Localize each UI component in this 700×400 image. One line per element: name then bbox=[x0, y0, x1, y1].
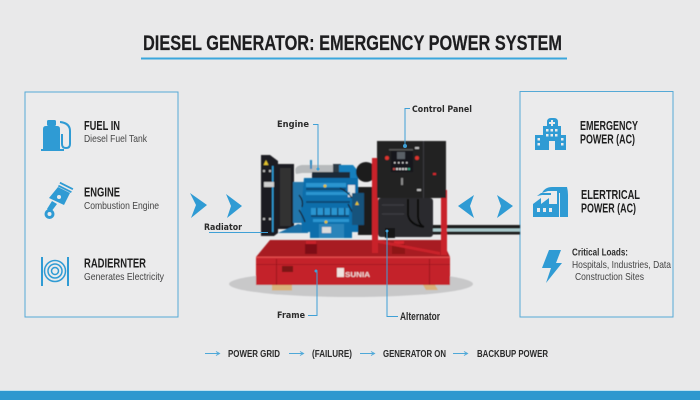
arrow bbox=[205, 352, 220, 356]
step: generator on: GENERATOR ON bbox=[383, 348, 446, 360]
frame: skid base: SUNIA bbox=[345, 270, 371, 279]
frame: lifting posts bbox=[372, 158, 447, 255]
callout: radiator bbox=[204, 223, 268, 233]
step: backup power: BACKBUP POWER bbox=[477, 348, 548, 360]
icon: fuel tank bbox=[41, 120, 71, 151]
text: engine bbox=[84, 186, 159, 212]
control panel bbox=[377, 141, 446, 198]
text: electrical power: POWER (AC) bbox=[581, 202, 636, 216]
icon: factory bbox=[533, 187, 568, 217]
text: emergency power: POWER (AC) bbox=[580, 132, 635, 146]
text: critical loads: Hospitals, Industries, Data bbox=[572, 259, 671, 271]
callout: control panel bbox=[403, 105, 472, 148]
ground shadow bbox=[229, 271, 473, 297]
text: electrical power: ELERTRICAL bbox=[581, 188, 640, 202]
icon: radiator bbox=[42, 257, 68, 286]
arrows: outflow bbox=[458, 195, 513, 218]
callout: engine: Engine bbox=[277, 120, 309, 130]
engine block bbox=[278, 160, 372, 238]
step: power grid: POWER GRID bbox=[228, 348, 280, 360]
footer bar bbox=[0, 390, 700, 400]
text: emergency power bbox=[580, 119, 638, 146]
panel: inputs bbox=[25, 92, 178, 317]
callout: frame bbox=[277, 270, 318, 321]
arrow bbox=[289, 352, 304, 356]
text: electrical power bbox=[581, 188, 640, 216]
text: radiernter: RADIERNTER bbox=[84, 256, 146, 270]
callout: engine bbox=[277, 120, 320, 170]
frame: skid top bbox=[256, 240, 450, 257]
flywheel bbox=[356, 162, 376, 182]
step: failure: (FAILURE) bbox=[312, 348, 352, 360]
text: emergency power: EMERGENCY bbox=[580, 119, 638, 133]
output cables bbox=[428, 225, 520, 234]
text: radiernter bbox=[84, 256, 165, 283]
text: engine: ENGINE bbox=[84, 186, 120, 200]
icon: lightning bolt bbox=[542, 250, 562, 283]
text: fuel in: FUEL IN bbox=[84, 119, 120, 133]
callout: alternator bbox=[386, 230, 441, 323]
radiator bbox=[261, 155, 294, 236]
text: radiernter: Generates Electricity bbox=[84, 271, 165, 283]
process flow bbox=[205, 348, 548, 360]
icon: hospital bbox=[535, 118, 566, 150]
text: engine: Combustion Engine bbox=[84, 200, 159, 212]
callout: frame: Frame bbox=[277, 311, 305, 321]
panel: outputs bbox=[520, 92, 673, 317]
generator bbox=[229, 141, 520, 297]
arrow bbox=[360, 352, 374, 356]
alternator bbox=[378, 198, 433, 238]
callout: control panel: Control Panel bbox=[412, 105, 472, 115]
text: critical loads: Critical Loads: bbox=[572, 246, 628, 258]
icon: piston bbox=[44, 182, 73, 219]
callout: radiator: Radiator bbox=[204, 223, 242, 233]
callout: alternator: Alternator bbox=[400, 311, 441, 323]
text: critical loads bbox=[572, 246, 671, 283]
title: DIESEL GENERATOR: EMERGENCY POWER SYSTEM bbox=[143, 32, 562, 55]
arrow bbox=[453, 352, 468, 356]
text: fuel in: Diesel Fuel Tank bbox=[84, 133, 148, 145]
frame: skid base bbox=[256, 241, 450, 290]
arrows: inflow bbox=[190, 193, 242, 218]
text: critical loads: Construction Sites bbox=[575, 271, 644, 283]
text: fuel in bbox=[84, 119, 148, 145]
